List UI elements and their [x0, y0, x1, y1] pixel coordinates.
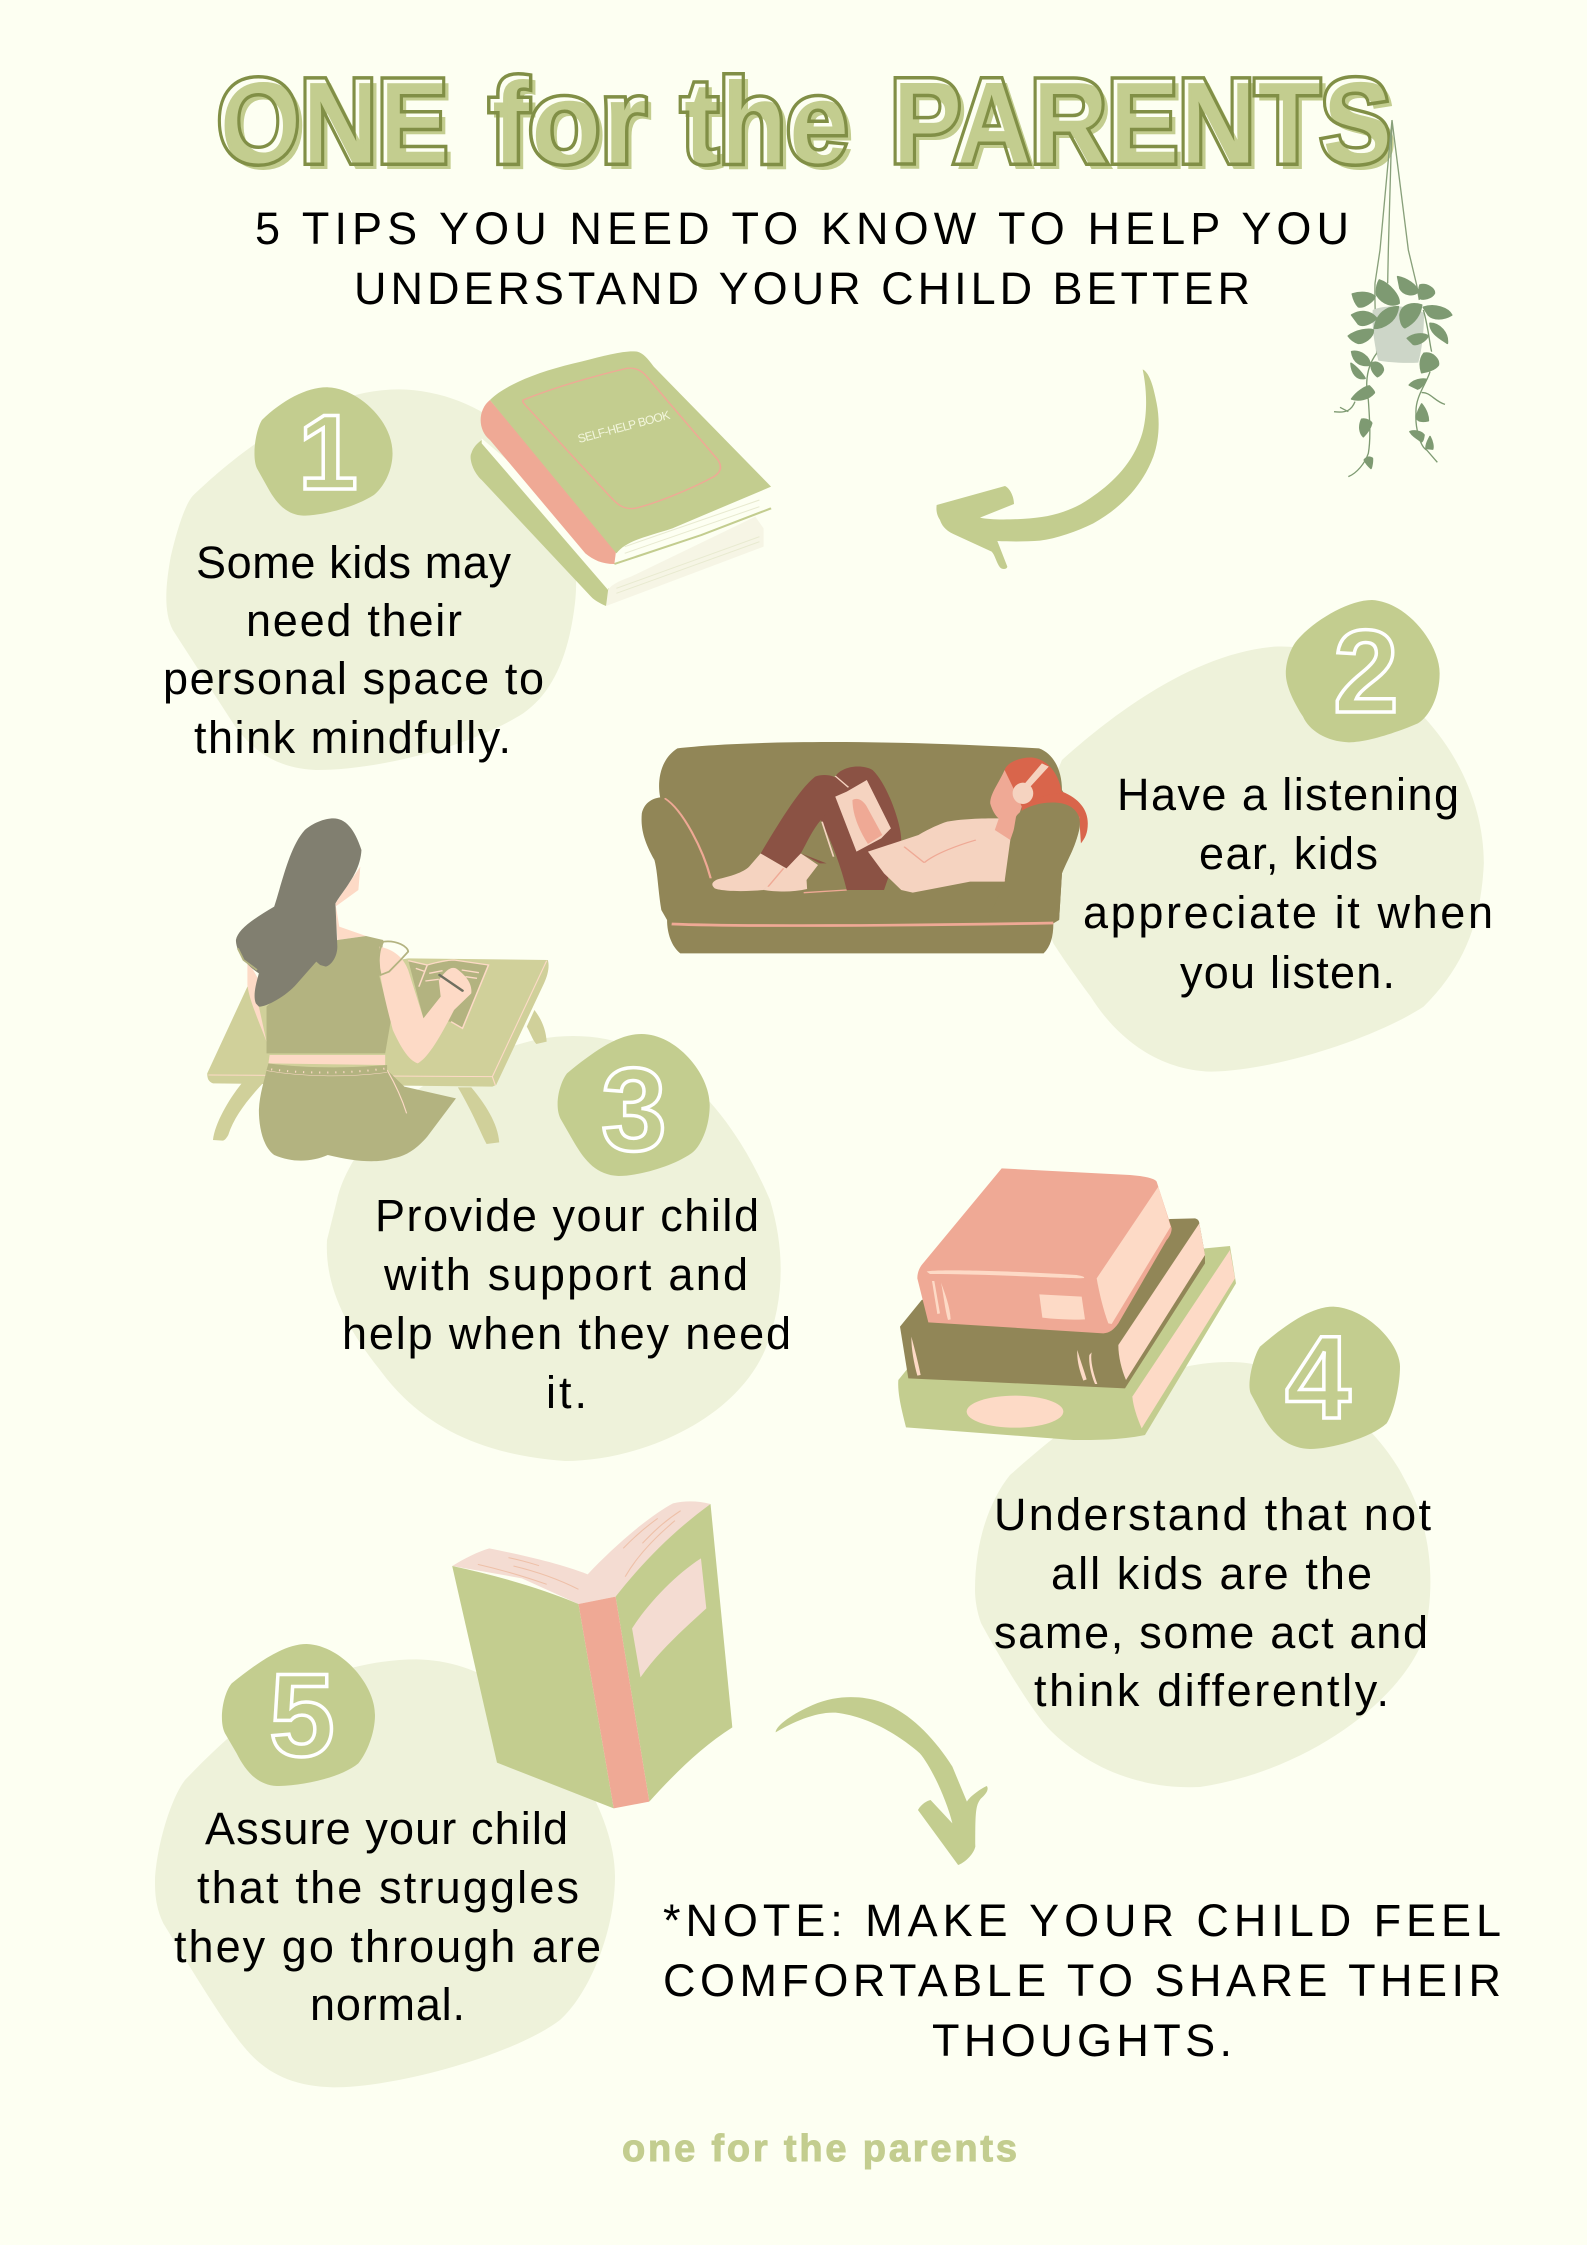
tip 4 text: same, some act and — [994, 1607, 1428, 1658]
subtitle: 5 TIPS YOU NEED TO KNOW TO HELP YOU — [255, 203, 1349, 254]
number badge 3 — [558, 1034, 710, 1176]
note text: THOUGHTS. — [932, 2015, 1232, 2066]
tip 2 text: appreciate it when — [1083, 887, 1493, 938]
tip 2 text — [1083, 769, 1493, 998]
tip 3 text: Provide your child — [375, 1190, 759, 1241]
illustration: woman writing at table — [207, 818, 549, 1161]
footer: one for the parents — [622, 2128, 1017, 2170]
number badge 2: 2 — [1333, 606, 1399, 738]
note text — [663, 1895, 1501, 2066]
number badge 1: 1 — [298, 392, 358, 512]
icon: open book — [452, 1501, 732, 1808]
tip 5 text: that the struggles — [197, 1862, 579, 1913]
title: the — [681, 55, 848, 188]
title: for — [489, 55, 646, 188]
tip 4 text: think differently. — [1034, 1665, 1389, 1716]
tip 4 text — [994, 1489, 1431, 1716]
icon: self-help book — [471, 351, 771, 606]
tip 5 text: normal. — [310, 1979, 465, 2030]
illustration: person reading on sofa — [642, 742, 1088, 953]
tip 3 text — [342, 1190, 791, 1418]
panel: tip 1 — [163, 351, 771, 770]
panel: tip 4 — [898, 1168, 1431, 1787]
number badge 4: 4 — [1285, 1312, 1351, 1444]
title — [218, 72, 1394, 170]
title: ONE — [222, 60, 453, 193]
arrow: from title to tip 1 — [936, 369, 1159, 569]
tip 5 text: Assure your child — [205, 1803, 568, 1854]
number badge 1 — [254, 387, 393, 516]
tip 2 background blob — [1022, 646, 1484, 1072]
arrow: from tip 5 to note — [776, 1697, 988, 1865]
subtitle — [255, 203, 1349, 314]
tip 1 text: Some kids may — [196, 537, 512, 588]
icon: self-help book: SELF-HELP BOOK — [576, 408, 672, 446]
number badge 5 — [222, 1644, 375, 1786]
number badge 5: 5 — [269, 1650, 335, 1782]
number badge 3: 3 — [601, 1044, 667, 1176]
subtitle: UNDERSTAND YOUR CHILD BETTER — [354, 263, 1250, 314]
title: PARENTS — [890, 55, 1391, 188]
tip 3 background blob — [327, 1036, 781, 1461]
infographic page — [155, 72, 1500, 2170]
tip 1 text — [163, 537, 544, 763]
note text: *NOTE: MAKE YOUR CHILD FEEL — [663, 1895, 1501, 1946]
title: ONE — [217, 55, 448, 188]
illustration: stack of books — [898, 1168, 1236, 1440]
number badge 4 — [1249, 1307, 1400, 1449]
tip 2 text: you listen. — [1180, 947, 1395, 998]
title: PARENTS — [895, 60, 1396, 193]
tip 2 text: Have a listening — [1117, 769, 1459, 820]
number badge 2 — [1286, 600, 1440, 742]
tip 5 background blob — [155, 1659, 615, 2087]
title: for — [494, 60, 651, 193]
tip 4 text: Understand that not — [994, 1489, 1431, 1540]
title: the — [686, 60, 853, 193]
tip 3 text: with support and — [383, 1249, 748, 1300]
tip 2 text: ear, kids — [1199, 828, 1378, 879]
tip 4 text: all kids are the — [1051, 1548, 1372, 1599]
panel: tip 2 — [642, 600, 1493, 1072]
tip 3 text: it. — [546, 1367, 587, 1418]
panel: tip 3 — [207, 818, 791, 1461]
tip 3 text: help when they need — [342, 1308, 791, 1359]
tip 1 background blob — [166, 389, 576, 770]
tip 1 text: personal space to — [163, 653, 544, 704]
panel: tip 5 — [155, 1501, 732, 2087]
note text: COMFORTABLE TO SHARE THEIR — [663, 1955, 1501, 2006]
tip 4 background blob — [975, 1362, 1430, 1787]
tip 5 text — [174, 1803, 601, 2030]
tip 1 text: need their — [246, 595, 462, 646]
tip 5 text: they go through are — [174, 1921, 601, 1972]
tip 1 text: think mindfully. — [194, 712, 511, 763]
icon: hanging plant — [1334, 120, 1452, 477]
